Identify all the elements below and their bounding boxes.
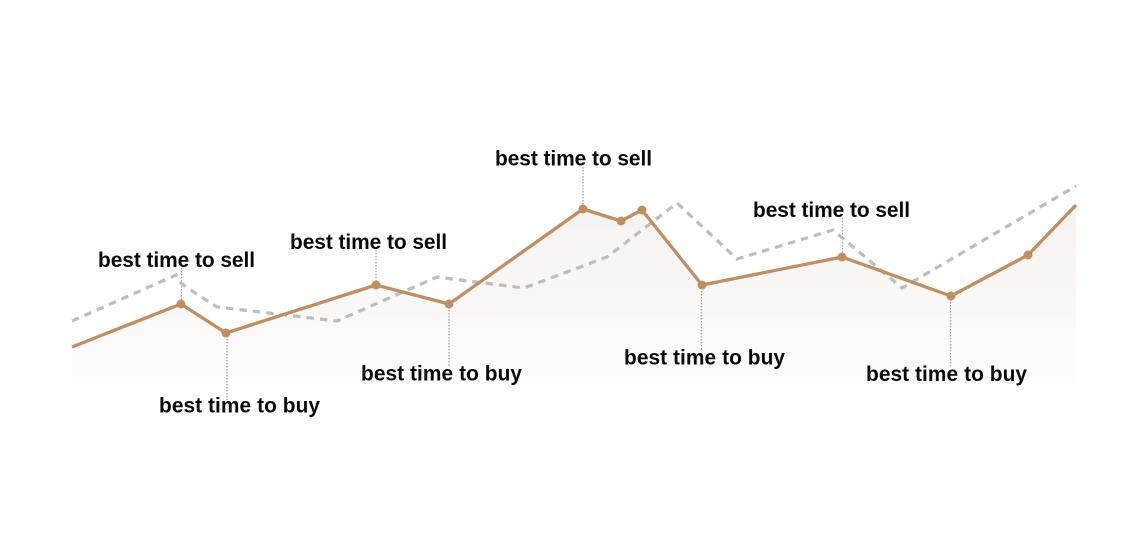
label: sell 4: best time to sell xyxy=(753,199,910,222)
label: sell 1: best time to sell xyxy=(98,249,255,272)
dotted leader lines xyxy=(182,167,950,400)
label: buy 3: best time to buy xyxy=(624,346,785,370)
label: buy 2: best time to buy xyxy=(361,362,522,386)
label: buy 4: best time to buy xyxy=(866,363,1027,386)
label: sell 2: best time to sell xyxy=(290,231,447,254)
solid brown price line xyxy=(72,205,1076,347)
shaded area under price line xyxy=(72,205,1076,392)
dashed grey comparison line xyxy=(72,186,1076,321)
label: buy 1: best time to buy xyxy=(159,394,320,418)
price line markers xyxy=(176,204,1032,338)
label: sell 3: best time to sell xyxy=(495,148,652,170)
